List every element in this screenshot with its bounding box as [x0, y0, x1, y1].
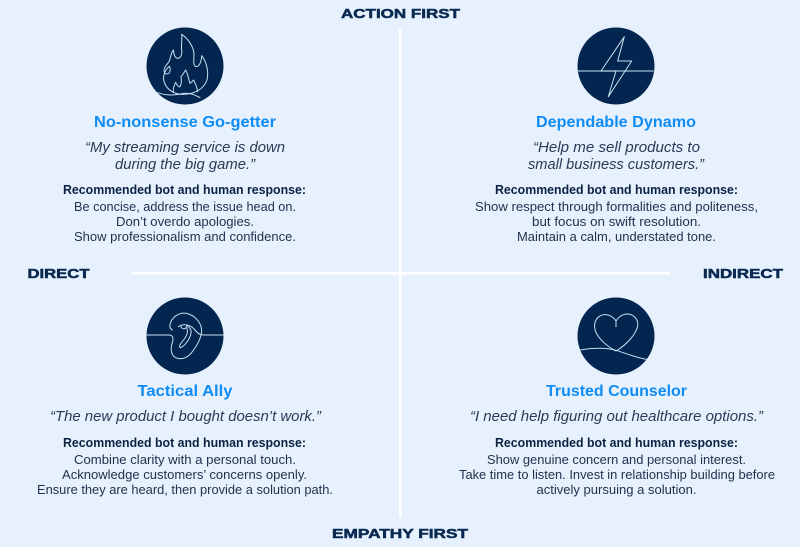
quote [85, 140, 285, 173]
axis label: indirect: INDIRECT [703, 266, 783, 281]
response text: Maintain a calm, understated tone. [517, 230, 716, 244]
quote: small business customers.” [528, 157, 705, 173]
response text: Don’t overdo apologies. [116, 215, 254, 229]
response text [459, 436, 775, 497]
panel: Trusted Counselor [459, 298, 775, 497]
quote: “The new product I bought doesn’t work.” [50, 409, 322, 425]
response text: Recommended bot and human response: [63, 436, 306, 450]
response text: Recommended bot and human response: [63, 183, 306, 197]
heading: Tactical Ally [138, 383, 233, 400]
response text: Acknowledge customers’ concerns openly. [62, 468, 307, 482]
response text: Recommended bot and human response: [495, 436, 738, 450]
quote: “Help me sell products to [533, 140, 700, 156]
response text [63, 183, 306, 244]
response text: actively pursuing a solution. [536, 483, 696, 497]
quote: during the big game.” [115, 157, 256, 173]
response text [475, 183, 758, 244]
response text [37, 436, 333, 497]
response text: Show genuine concern and personal interest. [487, 453, 746, 467]
icon: flame [146, 28, 224, 104]
response text: Combine clarity with a personal touch. [74, 453, 296, 467]
response text: Ensure they are heard, then provide a solution path. [37, 483, 333, 497]
response text: Show professionalism and confidence. [74, 230, 296, 244]
axis label: empathy first: EMPATHY FIRST [332, 526, 468, 541]
icon: lightning bolt [578, 28, 654, 104]
axis label: direct: DIRECT [28, 266, 90, 281]
response text: Be concise, address the issue head on. [74, 200, 296, 214]
icon: ear [146, 298, 224, 374]
response text: Show respect through formalities and politeness, [475, 200, 758, 214]
panel: Tactical Ally [37, 298, 333, 497]
axis label: action first: ACTION FIRST [341, 6, 460, 21]
panel: No-nonsense Go-getter [63, 28, 306, 244]
heading: Dependable Dynamo [536, 114, 696, 131]
heading: No-nonsense Go-getter [94, 114, 276, 131]
response text: Take time to listen. Invest in relationship building before [459, 468, 775, 482]
quote: “I need help figuring out healthcare options.” [470, 409, 764, 425]
quote: “My streaming service is down [85, 140, 285, 156]
heading: Trusted Counselor [546, 383, 687, 400]
quote [528, 140, 705, 173]
panel: Dependable Dynamo [475, 28, 758, 244]
response text: but focus on swift resolution. [532, 215, 701, 229]
icon: heart [578, 298, 654, 374]
response text: Recommended bot and human response: [495, 183, 738, 197]
